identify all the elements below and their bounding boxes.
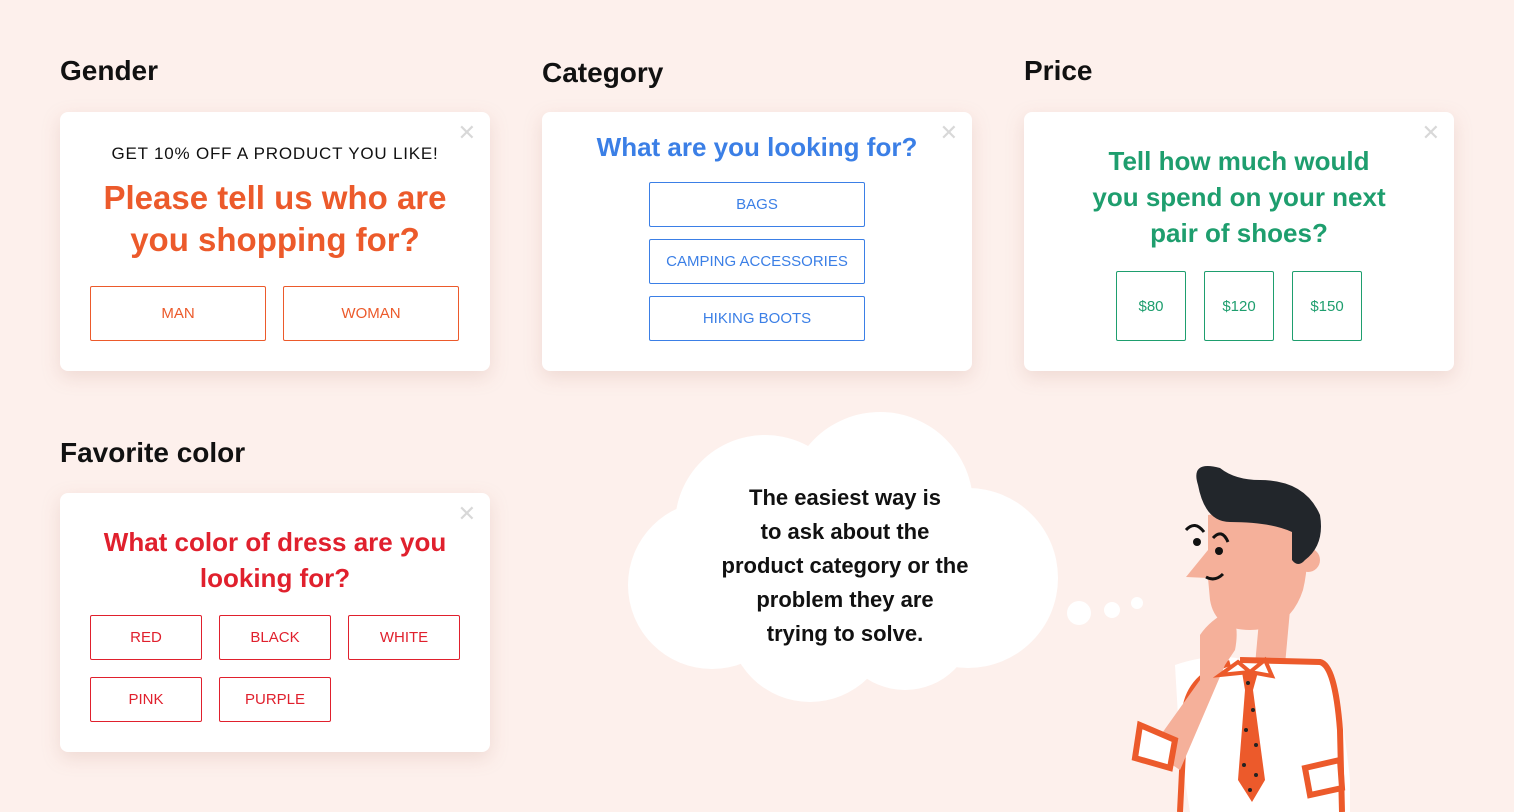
button: woman: WOMAN (341, 305, 401, 322)
button: red (90, 615, 202, 660)
text: color question: looking for? (200, 563, 350, 593)
button: black (219, 615, 331, 660)
button: black: BLACK (250, 629, 300, 646)
text: thought: The easiest way is (749, 485, 941, 510)
text: color question: What color of dress are you (104, 527, 446, 557)
button: man: MAN (161, 305, 195, 322)
text: thought: to ask about the (761, 519, 929, 544)
button: purple (219, 677, 331, 722)
text: category question: What are you looking for? (597, 132, 917, 162)
face (1193, 538, 1201, 546)
text: thought: problem they are (756, 587, 934, 612)
neck and body (1255, 610, 1290, 665)
button: purple: PURPLE (245, 691, 305, 708)
panel: category (542, 112, 972, 371)
panel: color: ✕ (458, 501, 476, 526)
button: hiking: HIKING BOOTS (703, 310, 811, 327)
button: 80 (1116, 271, 1186, 341)
button: pink (90, 677, 202, 722)
heading: Category: Category (542, 57, 663, 88)
button: 80: $80 (1138, 298, 1164, 314)
button: pink: PINK (128, 691, 164, 708)
button: woman (283, 286, 459, 341)
button: camping: CAMPING ACCESSORIES (666, 253, 848, 270)
text: gender question (104, 179, 446, 258)
text: thought (722, 485, 968, 646)
panel: price: ✕ (1422, 120, 1440, 145)
button: camping (649, 239, 865, 284)
text: price question (1092, 146, 1386, 248)
button: bags (649, 182, 865, 227)
panel: category: ✕ (940, 120, 958, 145)
panel: price (1024, 112, 1454, 371)
button: man (90, 286, 266, 341)
collar and tie (1220, 660, 1272, 676)
button: hiking (649, 296, 865, 341)
text: thought: product category or the (722, 553, 968, 578)
button: 150 (1292, 271, 1362, 341)
hand arm (1150, 610, 1237, 770)
text: color question (104, 527, 446, 593)
button: 120 (1204, 271, 1274, 341)
text: discount: GET 10% OFF A PRODUCT YOU LIKE! (111, 144, 439, 163)
text: gender question: you shopping for? (130, 221, 420, 258)
panel: gender: ✕ (458, 120, 476, 145)
head (1186, 505, 1307, 630)
illustration: thinking man (1132, 466, 1350, 812)
button: bags: BAGS (736, 196, 778, 213)
button: white: WHITE (380, 629, 428, 646)
text: gender question: Please tell us who are (104, 179, 446, 216)
heading: Price: Price (1024, 55, 1092, 86)
hair (1196, 466, 1321, 564)
panel: color (60, 493, 490, 752)
heading: Favorite color: Favorite color (60, 437, 245, 468)
button: red: RED (130, 629, 162, 646)
button: white (348, 615, 460, 660)
text: price question: you spend on your next (1092, 182, 1386, 212)
text: price question: Tell how much would (1109, 146, 1369, 176)
button: 120: $120 (1222, 298, 1256, 314)
text: thought: trying to solve. (767, 621, 923, 646)
cuffs (1135, 725, 1175, 768)
button: 150: $150 (1310, 298, 1344, 314)
panel: gender (60, 112, 490, 371)
text: price question: pair of shoes? (1150, 218, 1328, 248)
heading: Gender: Gender (60, 55, 158, 86)
